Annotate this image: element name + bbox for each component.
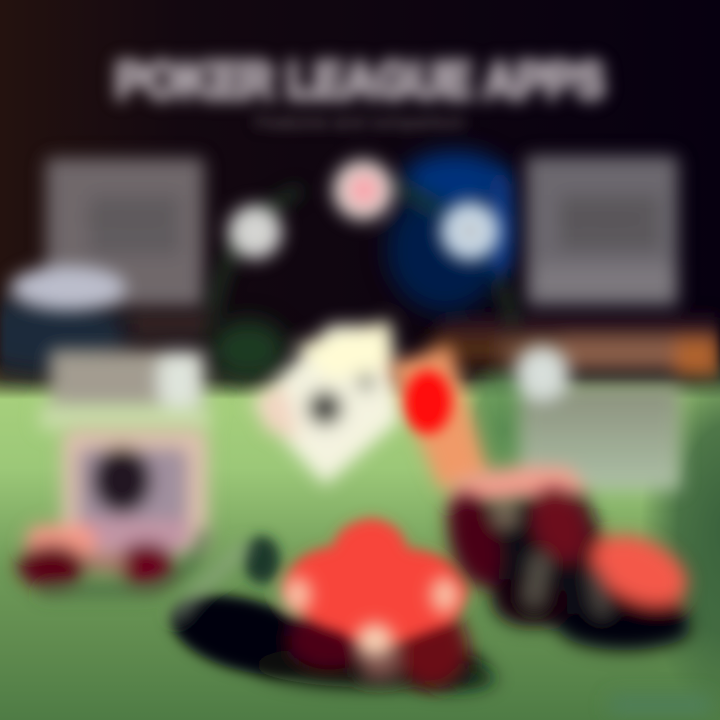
chip stack shadow	[40, 530, 205, 590]
blue arc backdrop	[387, 188, 503, 312]
chip body	[18, 428, 208, 588]
panel: lower right card	[515, 346, 680, 490]
panel: left app card	[46, 158, 204, 308]
stack dark body	[438, 480, 698, 650]
watermark	[610, 695, 710, 715]
subtitle: Features and comparison	[255, 113, 465, 132]
brown shelf under left card	[130, 312, 210, 336]
panel: lower left card	[40, 350, 210, 430]
icon: centre pink circle	[333, 160, 393, 220]
stack pink top	[450, 466, 590, 510]
chips: base lower shadow	[255, 643, 485, 687]
chip dark red rim	[286, 608, 468, 688]
icon: right blue-white circle	[441, 202, 499, 260]
chips: left stack	[18, 428, 208, 590]
chips: grey trail	[175, 545, 248, 620]
green connector arc	[212, 185, 515, 325]
icon: white playing cards	[252, 320, 400, 485]
background: felt base	[0, 360, 720, 720]
chips: small dark green token	[244, 536, 280, 584]
chips: large red poker chip	[283, 518, 468, 688]
left device silver lid	[10, 266, 126, 310]
background: middle right felt	[455, 355, 555, 505]
left device dark base	[0, 295, 130, 375]
background: darker felt right side	[640, 340, 720, 720]
panel: right app card: App features	[557, 209, 643, 226]
chip cream edge spots	[283, 577, 459, 656]
chips: right stack	[438, 466, 698, 650]
chips: base right shadow	[415, 666, 495, 690]
panel: right app card	[526, 156, 678, 306]
icon: orange playing card	[388, 345, 490, 490]
chip red face	[283, 518, 468, 645]
panel: left app card: App features	[82, 209, 168, 226]
blue right edge	[486, 170, 514, 280]
chips: dark base stack shadow	[162, 581, 328, 689]
title: POKER LEAGUE APPS	[115, 52, 605, 110]
icon: left white circle	[228, 205, 282, 259]
icon: red suit	[404, 370, 452, 434]
background: wooden table rim	[430, 318, 720, 376]
dark shadow behind cards	[210, 320, 286, 380]
blue highlight	[403, 152, 507, 208]
